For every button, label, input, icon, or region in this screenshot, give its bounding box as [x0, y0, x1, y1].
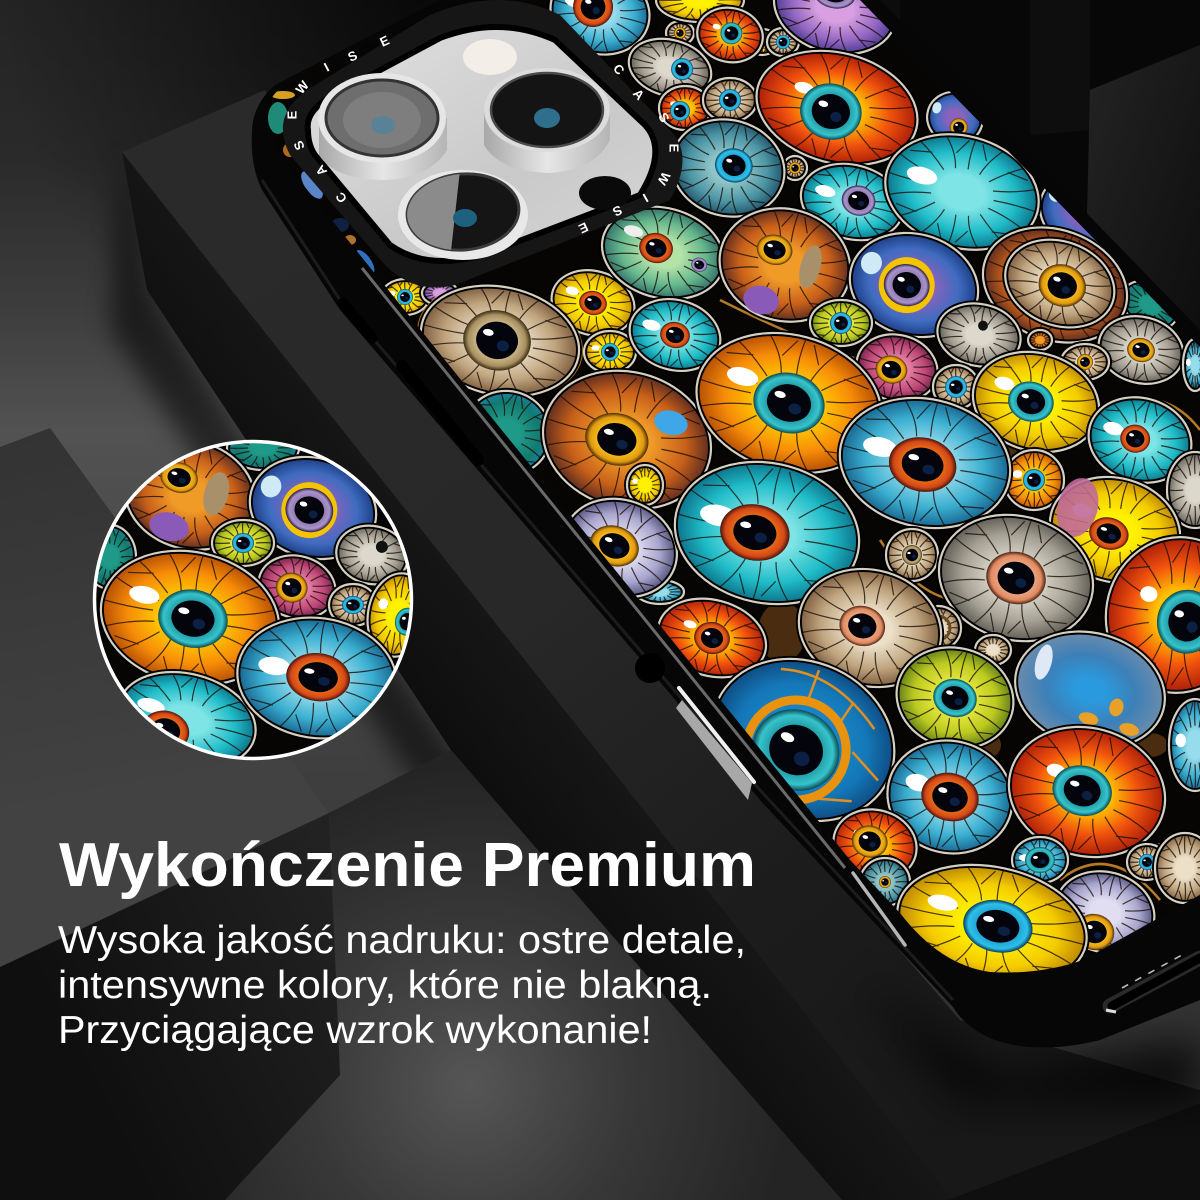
CASEWISE ring lettering, right: S	[610, 202, 625, 220]
phone case body	[252, 0, 1200, 1048]
flash	[463, 39, 517, 75]
CASEWISE ring lettering, right: E	[667, 144, 682, 153]
lens top-right	[484, 68, 610, 173]
CASEWISE ring lettering, right: S	[655, 110, 673, 125]
microphone hole	[579, 176, 631, 210]
side button long	[402, 366, 478, 460]
CASEWISE ring lettering, right: C	[610, 61, 628, 78]
camera plate	[308, 27, 655, 261]
side button silver	[635, 653, 754, 800]
CASEWISE ring lettering, left: W	[292, 77, 312, 97]
charging port	[1106, 955, 1200, 1012]
CASEWISE ring lettering, left: I	[321, 60, 332, 75]
CASEWISE ring lettering, right: E	[576, 219, 591, 237]
body text: intensywne kolory, które nie blakną.	[58, 964, 712, 1007]
printed eyeball artwork	[268, 0, 1200, 972]
body text: Wysoka jakość nadruku: ostre detale,	[58, 919, 746, 962]
CASEWISE ring lettering, right	[576, 61, 682, 237]
CASEWISE ring lettering, left: S	[290, 138, 308, 153]
CASEWISE ring lettering, left: A	[312, 162, 330, 179]
CASEWISE ring lettering, left: E	[377, 32, 392, 50]
CASEWISE ring lettering, right: A	[630, 86, 648, 103]
lens bottom	[398, 170, 528, 260]
body text: Przyciągające wzrok wykonanie!	[58, 1009, 652, 1052]
title: Wykończenie Premium	[59, 831, 756, 900]
lens top-left	[318, 73, 447, 180]
CASEWISE ring lettering, right: W	[654, 169, 673, 188]
camera ring and lens plate	[283, 0, 682, 288]
body text	[58, 919, 746, 1052]
artwork strip beside camera	[268, 91, 378, 277]
side button small	[343, 303, 372, 338]
CASEWISE ring lettering, left: E	[284, 110, 299, 119]
CASEWISE ring lettering, left: C	[332, 189, 350, 206]
phone shadow	[860, 980, 1200, 1100]
CASEWISE ring lettering, right: I	[640, 191, 651, 205]
magnified detail circle	[92, 440, 414, 760]
CASEWISE ring lettering, left	[284, 32, 392, 206]
CASEWISE ring lettering, left: S	[345, 47, 360, 65]
